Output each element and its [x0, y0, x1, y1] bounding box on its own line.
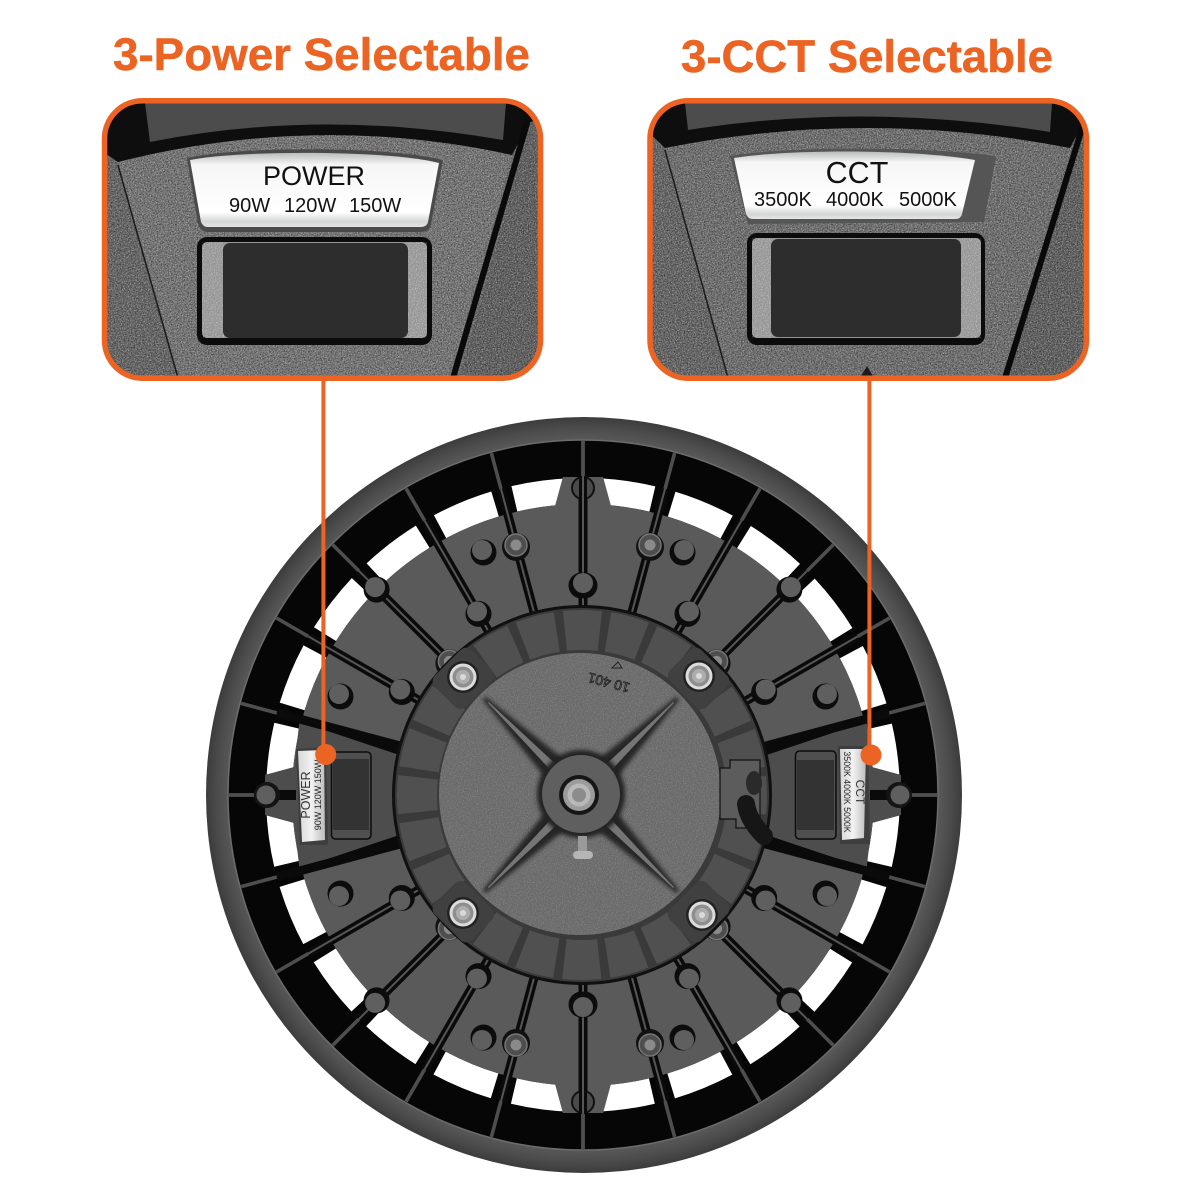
center boss and bolt [537, 750, 625, 838]
power label on lamp: POWER [299, 771, 313, 819]
white vent slots [279, 491, 887, 1099]
CCT label on lamp [838, 746, 870, 844]
base plate [292, 504, 874, 1086]
power rocker switch [197, 237, 432, 345]
CCT label on lamp: CCT [853, 780, 867, 805]
panel: CCT selector close-up [646, 98, 1092, 383]
spokes and knobs: north-west quadrant [229, 441, 612, 824]
power label on lamp [296, 747, 328, 845]
corner bolts [447, 660, 718, 931]
spokes and knobs: north-east quadrant [554, 441, 937, 824]
panel: power selector close-up [100, 98, 546, 383]
power label on lamp: 90W 120W 150W [313, 759, 323, 830]
inner round cover [439, 653, 721, 935]
engraved mark: 10 401 [586, 670, 631, 696]
cable connector [720, 760, 764, 836]
power label plate: 90W [229, 195, 270, 217]
heading: 3-Power Selectable: 3-Power Selectable [113, 29, 530, 80]
CCT label plate: 5000K [899, 189, 957, 211]
CCT switch on lamp [796, 751, 836, 839]
black vent ring [228, 440, 938, 1150]
CCT rocker switch [747, 233, 985, 345]
CCT label plate: 3500K [754, 189, 812, 211]
outer rim [206, 417, 962, 1173]
lamp: high bay back view [206, 417, 962, 1173]
CCT label on lamp: 3500K 4000K 5000K [842, 751, 852, 833]
central hub collar [392, 605, 772, 985]
ground screw [573, 836, 593, 859]
callout line: power [315, 378, 336, 765]
CCT label plate: 4000K [826, 189, 884, 211]
power label plate: 120W [284, 195, 336, 217]
CCT label plate: CCT [826, 156, 888, 190]
heading: 3-CCT Selectable: 3-CCT Selectable [681, 31, 1053, 82]
spokes and knobs: south-east quadrant [554, 766, 937, 1149]
power switch on lamp [332, 752, 371, 839]
power label plate: POWER [263, 161, 365, 191]
X ribs [475, 689, 687, 901]
CCT label plate [730, 148, 996, 224]
spokes and knobs: south-west quadrant [229, 766, 612, 1149]
callout line: CCT [860, 378, 882, 766]
power label plate [187, 149, 443, 232]
power label plate: 150W [349, 195, 401, 217]
